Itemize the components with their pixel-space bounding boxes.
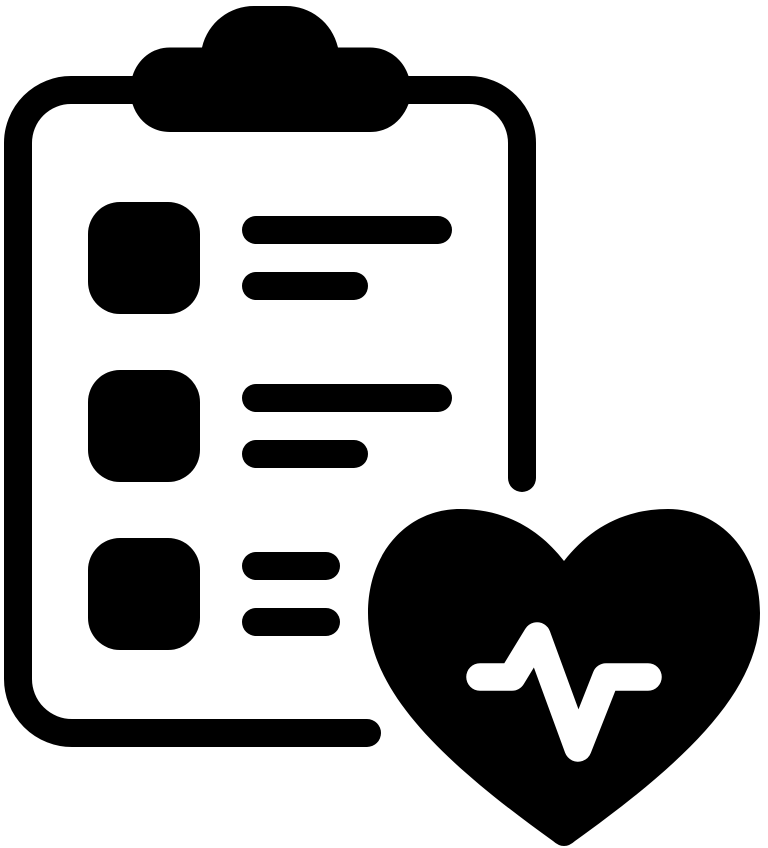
list row 1 (88, 202, 452, 314)
list row 2 (88, 370, 452, 482)
icon: heartbeat pulse line (480, 636, 648, 748)
clipboard outline (18, 90, 522, 733)
clipboard clip (132, 6, 410, 132)
list row 3 (88, 538, 340, 650)
icon: heart (368, 509, 760, 846)
